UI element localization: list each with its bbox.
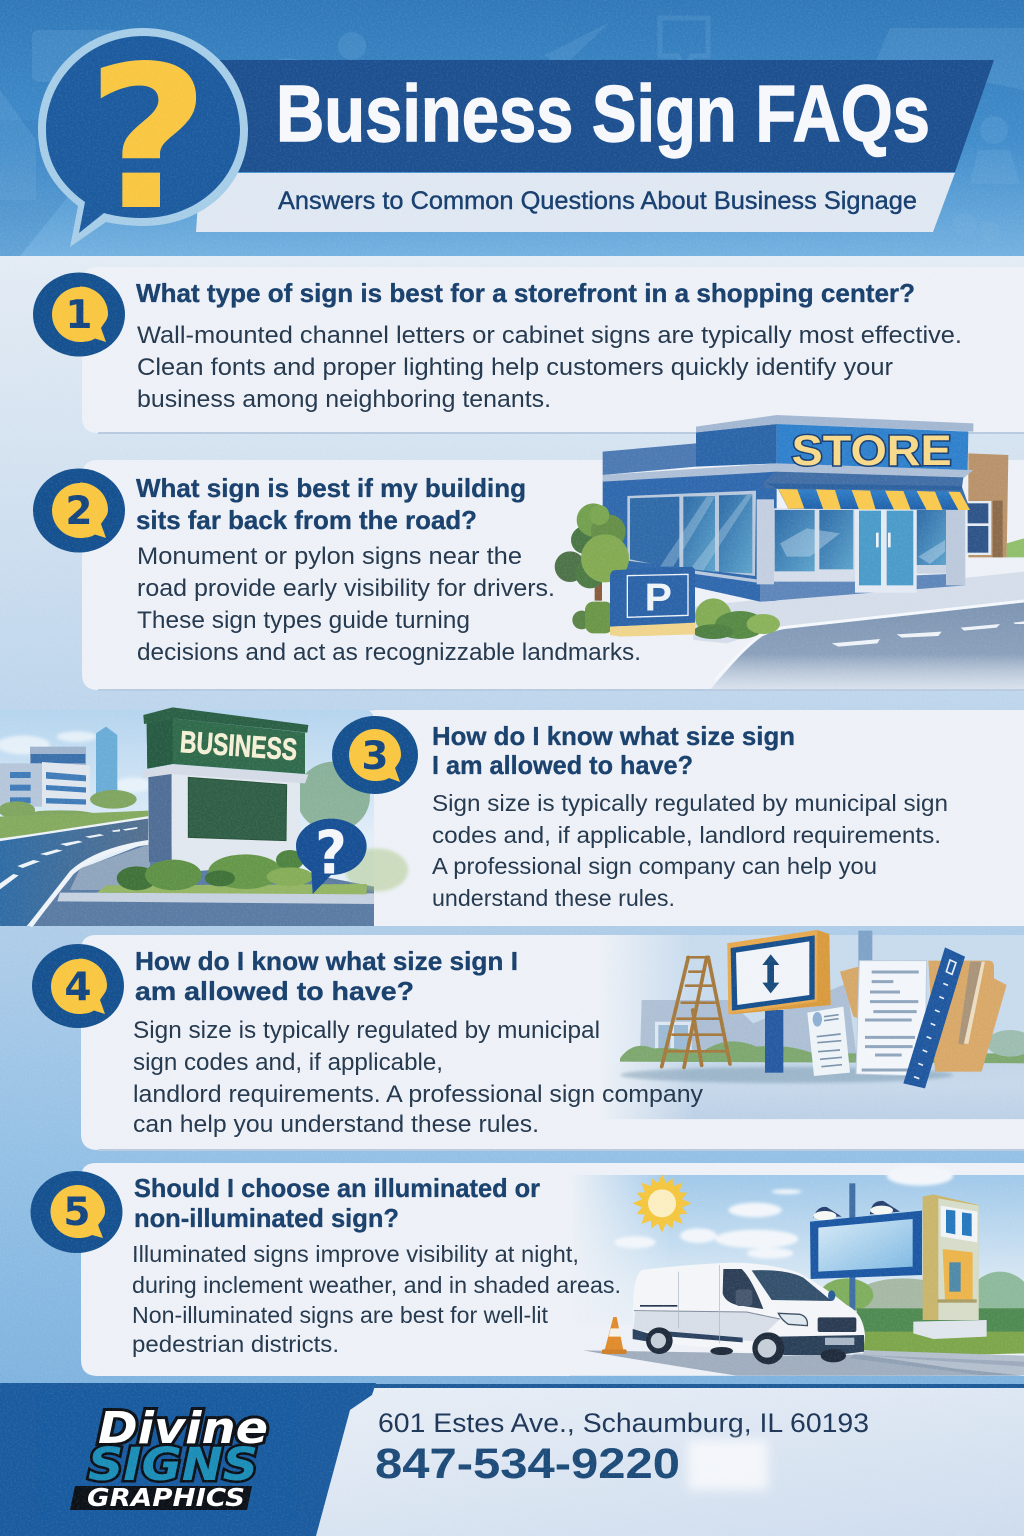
phone: 847-534-9220 (375, 1440, 680, 1488)
business sign text: BUSINESS (179, 725, 298, 767)
panel: question 2 (33, 415, 1024, 690)
logo: SIGNS (88, 1438, 258, 1491)
answer 3: understand these rules. (432, 885, 675, 911)
wheels (646, 1327, 846, 1364)
bushes (572, 598, 780, 639)
awning (766, 483, 970, 509)
answer 4: can help you understand these rules. (133, 1111, 539, 1138)
heading 5 (134, 1173, 540, 1233)
parking sign (610, 567, 695, 637)
answer 3 (432, 790, 948, 911)
sky and ground backdrop (600, 935, 1024, 1119)
tree (555, 503, 629, 601)
answer 5: Illuminated signs improve visibility at night, (132, 1241, 579, 1267)
tower (913, 1194, 987, 1339)
ladder (662, 957, 730, 1067)
number badge 5 (30, 1171, 122, 1253)
page background (0, 256, 1024, 1386)
panel: question 4 (32, 930, 1024, 1150)
parking sign: P (645, 576, 672, 620)
size arrow (762, 954, 779, 993)
heading 2 (136, 473, 526, 535)
left windows (627, 491, 756, 576)
answer 4: landlord requirements. A professional sign company (133, 1081, 703, 1108)
traffic cone (602, 1317, 627, 1354)
panel: question 3 (360, 710, 1024, 926)
billboard (727, 930, 831, 1073)
store sign text: STORE (792, 427, 952, 475)
pavement and kerb (33, 842, 374, 926)
answer 5: pedestrian districts. (132, 1331, 339, 1357)
answer 1: Clean fonts and proper lighting help customers quickly identify your (137, 354, 893, 381)
trees and lawn (0, 790, 148, 838)
illustration: van and illuminated sign (570, 1166, 1024, 1383)
answer 2: Monument or pylon signs near the (137, 543, 522, 570)
monument structure (148, 770, 172, 862)
number badge 4: 4 (64, 965, 92, 1010)
blue ruler (903, 947, 965, 1088)
sign face (777, 424, 968, 470)
heading 5: Should I choose an illuminated or (134, 1173, 540, 1203)
illustration: monument sign (0, 707, 408, 926)
answer 2: decisions and act as recognizzable landmarks. (137, 639, 641, 666)
logo (35, 1390, 300, 1520)
question bubble: ? (315, 818, 347, 887)
subtitle: Answers to Common Questions About Business Signage (278, 187, 917, 215)
door (855, 510, 917, 593)
shrubs (620, 1041, 1024, 1063)
number badge 5: 5 (63, 1190, 91, 1235)
answer 3: A professional sign company can help you (432, 853, 877, 879)
grille and lamp (818, 1317, 856, 1332)
road and sidewalk (693, 572, 1024, 643)
answer 5: during inclement weather, and in shaded areas. (132, 1272, 621, 1298)
answer 4: sign codes and, if applicable, (133, 1049, 443, 1076)
footer (0, 1383, 1024, 1536)
number badge 1 (33, 272, 125, 356)
answer 2: road provide early visibility for drivers. (137, 575, 555, 602)
subtitle strip (196, 173, 955, 232)
answer 1 (137, 322, 962, 413)
title banner (200, 60, 994, 172)
road (850, 1350, 1024, 1375)
rear document tower (858, 931, 872, 971)
road (0, 818, 148, 926)
sun (626, 1168, 698, 1239)
answer 4 (133, 1017, 703, 1138)
shrubs (97, 850, 367, 894)
panel: question 5 (30, 1163, 1024, 1383)
heading 1: What type of sign is best for a storefront in a shopping center? (136, 278, 915, 308)
distant buildings (0, 727, 117, 812)
heading 4: am allowed to have? (135, 976, 414, 1006)
heading 2: What sign is best if my building (136, 473, 526, 503)
folder (840, 961, 1007, 1072)
billboard (810, 1183, 922, 1310)
number badge 4 (32, 944, 124, 1028)
left wall (603, 471, 777, 602)
number badge 3: 3 (361, 734, 389, 779)
tree behind sign (297, 762, 408, 892)
header band (0, 0, 1024, 256)
distant building (640, 983, 857, 1057)
band (603, 463, 973, 482)
answer 1: Wall-mounted channel letters or cabinet signs are typically most effective. (137, 322, 962, 349)
answer 3: Sign size is typically regulated by municipal sign (432, 790, 948, 816)
number badge 2: 2 (65, 489, 93, 534)
logo: Divine (98, 1403, 268, 1454)
large document (856, 961, 927, 1076)
answer 5 (132, 1241, 621, 1357)
greenery and lawn (820, 1272, 1024, 1356)
answer 2: These sign types guide turning (137, 607, 470, 634)
answer 5: Non-illuminated signs are best for well-lit (132, 1302, 549, 1328)
clouds (614, 1166, 953, 1259)
logo: GRAPHICS (87, 1483, 245, 1512)
heading 2: sits far back from the road? (136, 505, 477, 535)
faint background icons (0, 18, 1024, 242)
question mark speech bubble: ? (86, 23, 210, 254)
heading 5: non-illuminated sign? (134, 1203, 399, 1233)
neighbor building (968, 453, 1008, 557)
panel: question 1 (33, 267, 1024, 433)
illustration: storefront (555, 415, 1024, 690)
answer 3: codes and, if applicable, landlord requirements. (432, 822, 941, 848)
number badge 3 (332, 716, 418, 794)
address: 601 Estes Ave., Schaumburg, IL 60193 (378, 1408, 869, 1438)
question mark speech bubble (38, 23, 248, 254)
answer 2 (137, 543, 641, 666)
sky clouds (0, 731, 153, 792)
illustration: sign permit items (600, 930, 1024, 1119)
right front (757, 499, 774, 584)
sky (580, 1175, 1024, 1312)
heading 4: How do I know what size sign I (135, 946, 518, 976)
van (633, 1263, 865, 1364)
answer 4: Sign size is typically regulated by municipal (133, 1017, 600, 1044)
answer 1: business among neighboring tenants. (137, 386, 551, 413)
heading 3: I am allowed to have? (432, 750, 693, 780)
small document (807, 1007, 850, 1076)
number badge 2 (33, 468, 125, 552)
heading 3: How do I know what size sign (432, 721, 795, 751)
heading 4 (135, 946, 518, 1006)
windows (723, 1269, 763, 1309)
question bubble (296, 818, 367, 894)
heading 3 (432, 721, 795, 780)
upper block (696, 424, 777, 467)
number badge 1: 1 (65, 293, 93, 338)
